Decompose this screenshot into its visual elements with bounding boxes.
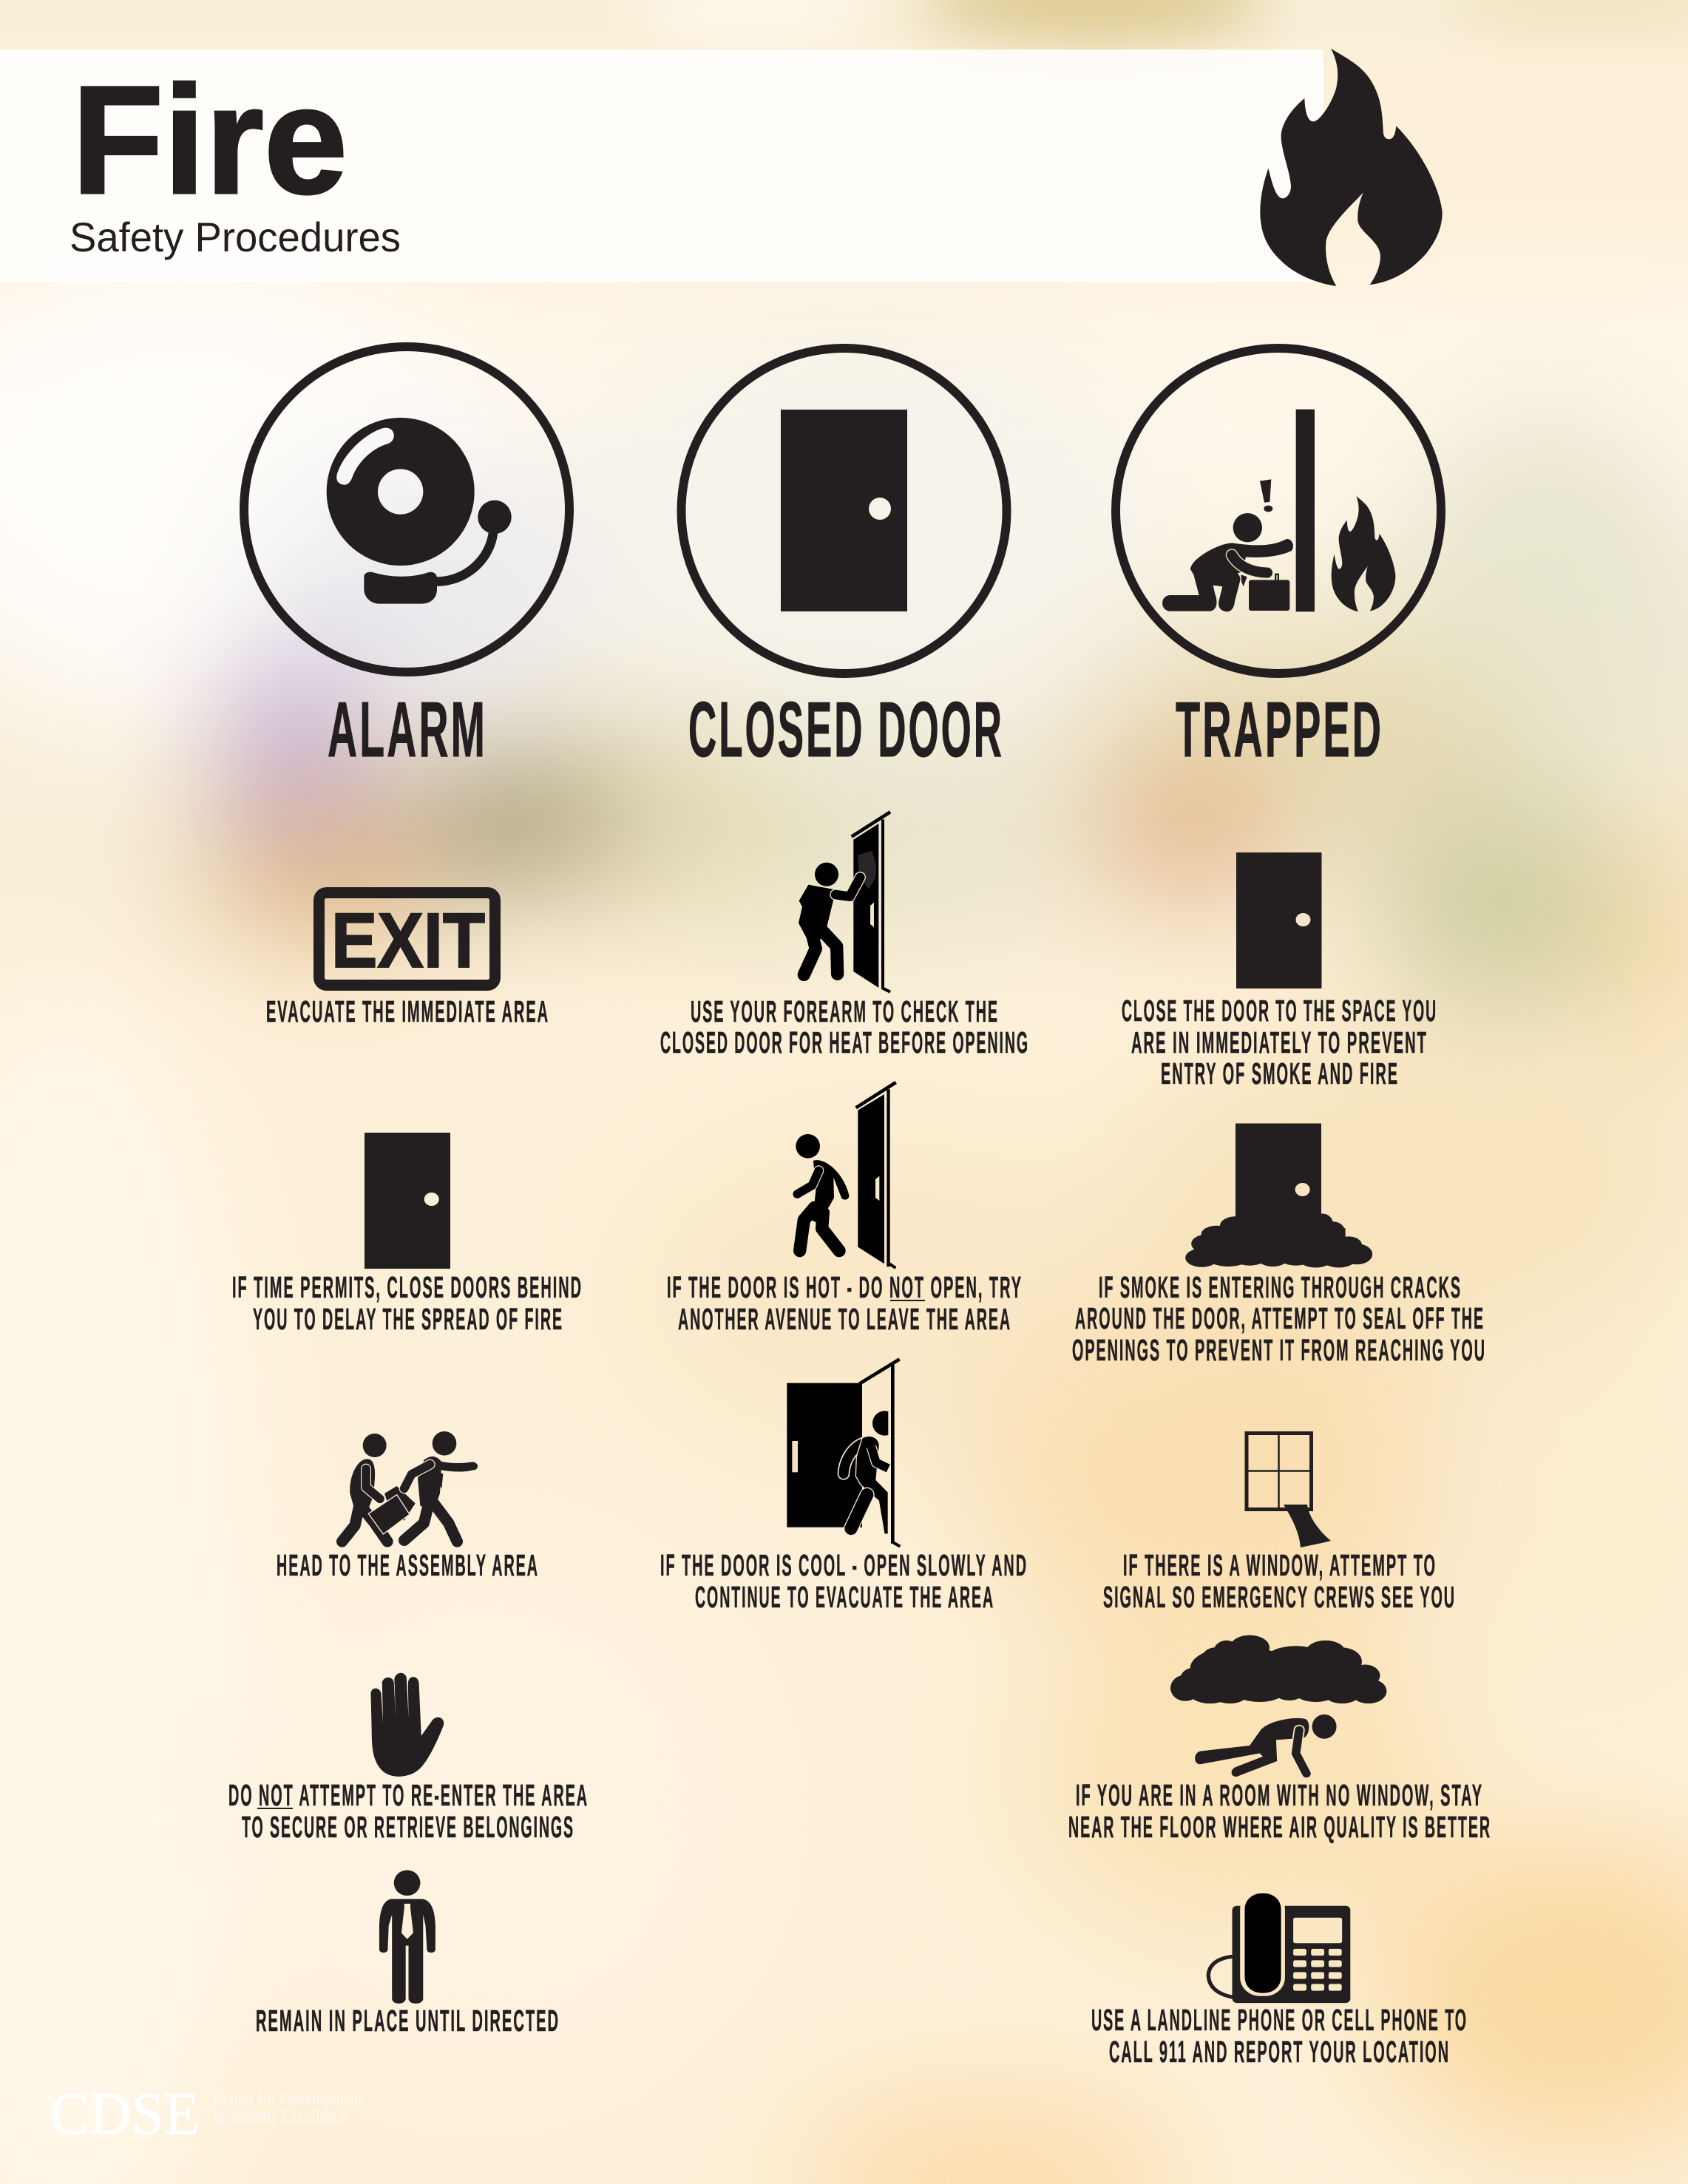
icon: standing man with tie xyxy=(379,1870,435,2004)
caption xyxy=(1103,1548,1456,1614)
icon: trapped person in circle xyxy=(1116,348,1441,674)
caption xyxy=(660,1548,1028,1614)
icon: smoke cloud above crawling person xyxy=(1170,1635,1386,1777)
text: IF TIME PERMITS, CLOSE DOORS BEHIND xyxy=(232,1270,583,1304)
step: call 911 xyxy=(1091,1890,1468,2069)
text: ANOTHER AVENUE TO LEAVE THE AREA xyxy=(678,1302,1011,1336)
text: TO SECURE OR RETRIEVE BELONGINGS xyxy=(242,1810,574,1844)
icon: stop hand xyxy=(370,1673,444,1777)
heading: trapped: TRAPPED xyxy=(1176,686,1383,773)
text: HEAD TO THE ASSEMBLY AREA xyxy=(277,1548,539,1582)
icon: bell in circle xyxy=(244,347,569,672)
logo: CDSE xyxy=(50,2080,362,2147)
step: signal from window xyxy=(1103,1433,1456,1614)
caption xyxy=(667,1270,1023,1336)
subtitle: Safety Procedures xyxy=(70,214,401,260)
caption xyxy=(1072,1270,1486,1367)
heading: alarm: ALARM xyxy=(328,686,487,773)
caption: YOU TO DELAY THE SPREAD OF FIRE xyxy=(253,1302,563,1336)
caption: CONTINUE TO EVACUATE THE AREA xyxy=(695,1580,994,1614)
column: closed door: CLOSED DOOR xyxy=(688,686,1004,773)
text: REMAIN IN PLACE UNTIL DIRECTED xyxy=(256,2004,560,2038)
step: assembly area xyxy=(277,1431,539,1582)
icon: flame xyxy=(1260,49,1443,286)
icon: person walking away from door xyxy=(796,1082,896,1268)
caption xyxy=(660,994,1029,1059)
caption xyxy=(1068,1778,1491,1844)
text: DO NOT ATTEMPT TO RE-ENTER THE AREA xyxy=(228,1778,589,1812)
step: smoke through cracks xyxy=(1072,1124,1486,1367)
text: IF THE DOOR IS HOT - DO NOT OPEN, TRY xyxy=(667,1270,1023,1304)
icon: door in circle xyxy=(682,348,1007,674)
caption: ENTRY OF SMOKE AND FIRE xyxy=(1161,1057,1399,1091)
text: IF THE DOOR IS COOL - OPEN SLOWLY AND xyxy=(660,1548,1028,1582)
header banner xyxy=(0,49,1443,286)
icon: window with cloth xyxy=(1247,1433,1331,1547)
text: CLOSED DOOR FOR HEAT BEFORE OPENING xyxy=(660,1025,1029,1059)
caption xyxy=(228,1778,589,1844)
logo: CDSE: CDSE xyxy=(50,2080,200,2147)
step: door is hot xyxy=(667,1082,1023,1336)
step: evacuate xyxy=(266,893,549,1028)
step: do not re-enter xyxy=(228,1673,589,1844)
step: stay near the floor xyxy=(1068,1635,1491,1844)
icon: door xyxy=(365,1133,450,1269)
step: close the door xyxy=(1122,852,1437,1091)
step: remain in place xyxy=(256,1870,560,2038)
column: trapped xyxy=(1116,348,1441,773)
icon: desk telephone xyxy=(1208,1890,1350,2003)
icon: person leaving through open door xyxy=(787,1359,900,1547)
title: Fire xyxy=(72,55,348,226)
icon: door with smoke xyxy=(1185,1124,1372,1268)
icon: exit sign: EXIT xyxy=(331,898,485,984)
step: check door for heat xyxy=(660,812,1029,1059)
step: close doors behind you xyxy=(232,1133,583,1336)
caption xyxy=(1122,994,1437,1091)
icon: two people hurrying with briefcases xyxy=(342,1431,478,1542)
icon: door xyxy=(1236,852,1322,988)
logo: CDSE: of Security Excellence xyxy=(213,2106,347,2126)
step: door is cool xyxy=(660,1359,1028,1614)
caption xyxy=(232,1270,583,1336)
column: alarm xyxy=(244,347,569,773)
text: EVACUATE THE IMMEDIATE AREA xyxy=(266,994,549,1028)
caption xyxy=(1091,2003,1468,2069)
column: closed door xyxy=(682,348,1007,773)
caption: USE YOUR FOREARM TO CHECK THE xyxy=(691,994,999,1028)
icon: person testing door xyxy=(799,812,890,992)
logo: CDSE: Center for Development xyxy=(213,2089,362,2109)
